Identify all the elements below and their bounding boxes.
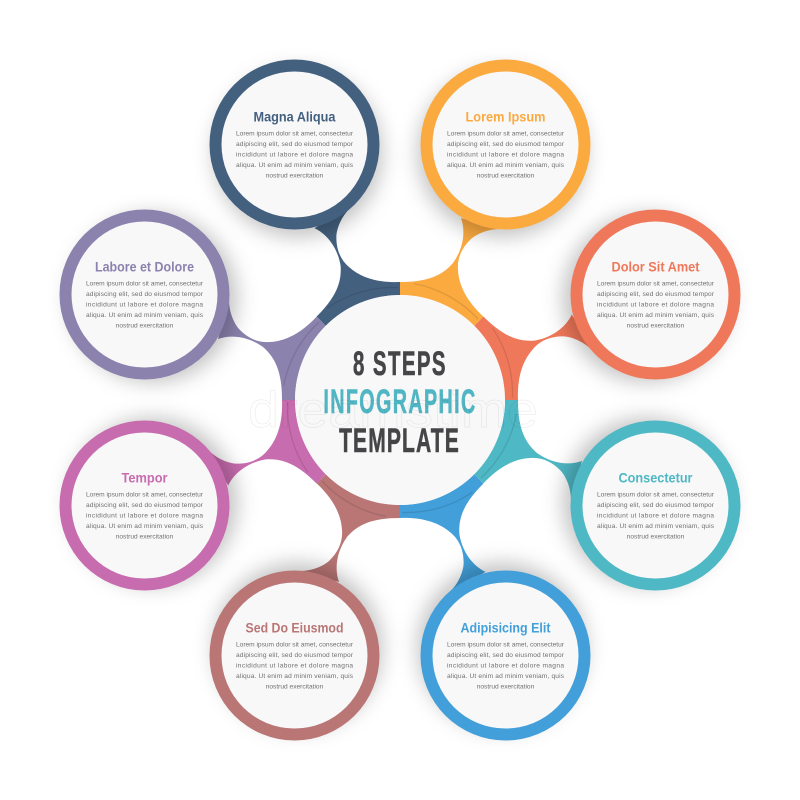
circle shadow: orange <box>418 69 586 237</box>
body text: Lorem ipsum dolor sit amet, consectetur <box>597 492 715 498</box>
body text: Lorem ipsum dolor sit amet, consectetur <box>86 492 204 498</box>
body text: Lorem ipsum dolor sit amet, consectetur <box>86 280 204 288</box>
body text: incididunt ut labore et dolore magna <box>236 152 353 158</box>
disc: purple <box>72 222 218 368</box>
body text <box>597 492 715 540</box>
ring: purple <box>60 210 230 380</box>
circle shadow: rose <box>214 563 382 731</box>
body text: Lorem ipsum dolor sit amet, consectetur <box>236 130 354 138</box>
body text: aliqua. Ut enim ad minim veniam, quis <box>597 523 715 530</box>
circle shadow: blue <box>418 563 586 731</box>
body text: nostrud exercitation <box>266 172 324 180</box>
disc: teal <box>582 432 728 578</box>
connector: coral <box>452 271 599 418</box>
watermark: dreamstime <box>248 382 538 438</box>
body text: adipiscing elit, sed do eiusmod tempor <box>236 652 354 659</box>
body text: Lorem ipsum dolor sit amet, consectetur <box>447 130 565 138</box>
body text: incididunt ut labore et dolore magna <box>86 512 203 520</box>
connector: orange <box>400 218 500 326</box>
circle shadow: purple <box>69 214 237 382</box>
disc: navy <box>222 72 368 218</box>
body text: incididunt ut labore et dolore magna <box>447 662 564 670</box>
body text <box>447 642 565 690</box>
heading: Tempor: Tempor <box>122 470 168 486</box>
ring: coral <box>570 210 740 380</box>
ring: navy <box>210 60 380 230</box>
body text: aliqua. Ut enim ad minim veniam, quis <box>86 312 204 319</box>
title: INFOGRAPHIC <box>323 382 477 420</box>
body text: adipiscing elit, sed do eiusmod tempor <box>236 141 354 148</box>
ring: rose <box>210 570 380 740</box>
disc: rose <box>222 582 368 728</box>
body text: Lorem ipsum dolor sit amet, consectetur <box>597 280 715 288</box>
body text: incididunt ut labore et dolore magna <box>597 302 714 308</box>
body text: incididunt ut labore et dolore magna <box>236 662 353 670</box>
disc: orange <box>432 72 578 218</box>
body text <box>86 280 204 330</box>
body text: aliqua. Ut enim ad minim veniam, quis <box>447 673 565 680</box>
connector: purple <box>218 300 326 400</box>
body text: nostrud exercitation <box>116 322 174 330</box>
body text: adipiscing elit, sed do eiusmod tempor <box>86 291 204 298</box>
body text: nostrud exercitation <box>627 534 685 540</box>
heading: Adipisicing Elit: Adipisicing Elit <box>460 620 551 636</box>
body text: adipiscing elit, sed do eiusmod tempor <box>86 502 204 509</box>
ring: blue <box>420 570 590 740</box>
ring: magenta <box>60 420 230 590</box>
step: Sed Do Eiusmod <box>210 474 400 740</box>
connector: magenta <box>201 382 348 529</box>
circle shadow: magenta <box>69 418 237 586</box>
body text: aliqua. Ut enim ad minim veniam, quis <box>447 162 565 169</box>
body text: incididunt ut labore et dolore magna <box>597 512 714 520</box>
step: Tempor <box>60 382 348 590</box>
circle shadow: navy <box>214 69 382 237</box>
body text: aliqua. Ut enim ad minim veniam, quis <box>236 162 354 169</box>
body text <box>236 130 354 180</box>
title: 8 STEPS <box>353 345 447 382</box>
ring: orange <box>420 60 590 230</box>
heading: Labore et Dolore: Labore et Dolore <box>95 258 194 274</box>
title: TEMPLATE <box>339 421 460 459</box>
body text: nostrud exercitation <box>627 322 685 330</box>
connector: teal <box>474 400 582 500</box>
body text <box>86 492 204 540</box>
body text: adipiscing elit, sed do eiusmod tempor <box>597 291 715 298</box>
disc: blue <box>432 582 578 728</box>
step: Dolor Sit Amet <box>452 210 740 418</box>
body text: nostrud exercitation <box>116 534 174 540</box>
ring: teal <box>570 420 740 590</box>
body text: nostrud exercitation <box>477 684 535 690</box>
body text <box>597 280 715 330</box>
body text: Lorem ipsum dolor sit amet, consectetur <box>447 642 565 648</box>
central circle <box>295 295 505 505</box>
heading: Sed Do Eiusmod: Sed Do Eiusmod <box>246 620 344 636</box>
step: Labore et Dolore <box>60 210 326 400</box>
title <box>323 345 477 459</box>
disc: coral <box>582 222 728 368</box>
step: Magna Aliqua <box>210 60 418 348</box>
body text: adipiscing elit, sed do eiusmod tempor <box>447 652 565 659</box>
disc: magenta <box>72 432 218 578</box>
heading: Lorem Ipsum: Lorem Ipsum <box>466 108 546 124</box>
body text: aliqua. Ut enim ad minim veniam, quis <box>236 673 354 680</box>
connector: navy <box>271 201 418 348</box>
body text: nostrud exercitation <box>477 172 535 180</box>
body text: incididunt ut labore et dolore magna <box>86 302 203 308</box>
circle shadow: teal <box>563 418 731 586</box>
body text: adipiscing elit, sed do eiusmod tempor <box>447 141 565 148</box>
body text: Lorem ipsum dolor sit amet, consectetur <box>236 642 354 648</box>
body text: adipiscing elit, sed do eiusmod tempor <box>597 502 715 509</box>
heading: Magna Aliqua: Magna Aliqua <box>254 108 336 124</box>
step: Consectetur <box>474 400 740 590</box>
step: Adipisicing Elit <box>382 452 590 740</box>
connector: blue <box>382 452 529 599</box>
body text: incididunt ut labore et dolore magna <box>447 152 564 158</box>
step: Lorem Ipsum <box>400 60 590 326</box>
body text <box>236 642 354 690</box>
body text: nostrud exercitation <box>266 684 324 690</box>
body text: aliqua. Ut enim ad minim veniam, quis <box>597 312 715 319</box>
body text: aliqua. Ut enim ad minim veniam, quis <box>86 523 204 530</box>
connector: rose <box>300 474 400 582</box>
circle shadow: coral <box>563 214 731 382</box>
body text <box>447 130 565 180</box>
heading: Dolor Sit Amet: Dolor Sit Amet <box>612 258 700 274</box>
heading: Consectetur: Consectetur <box>618 470 693 486</box>
